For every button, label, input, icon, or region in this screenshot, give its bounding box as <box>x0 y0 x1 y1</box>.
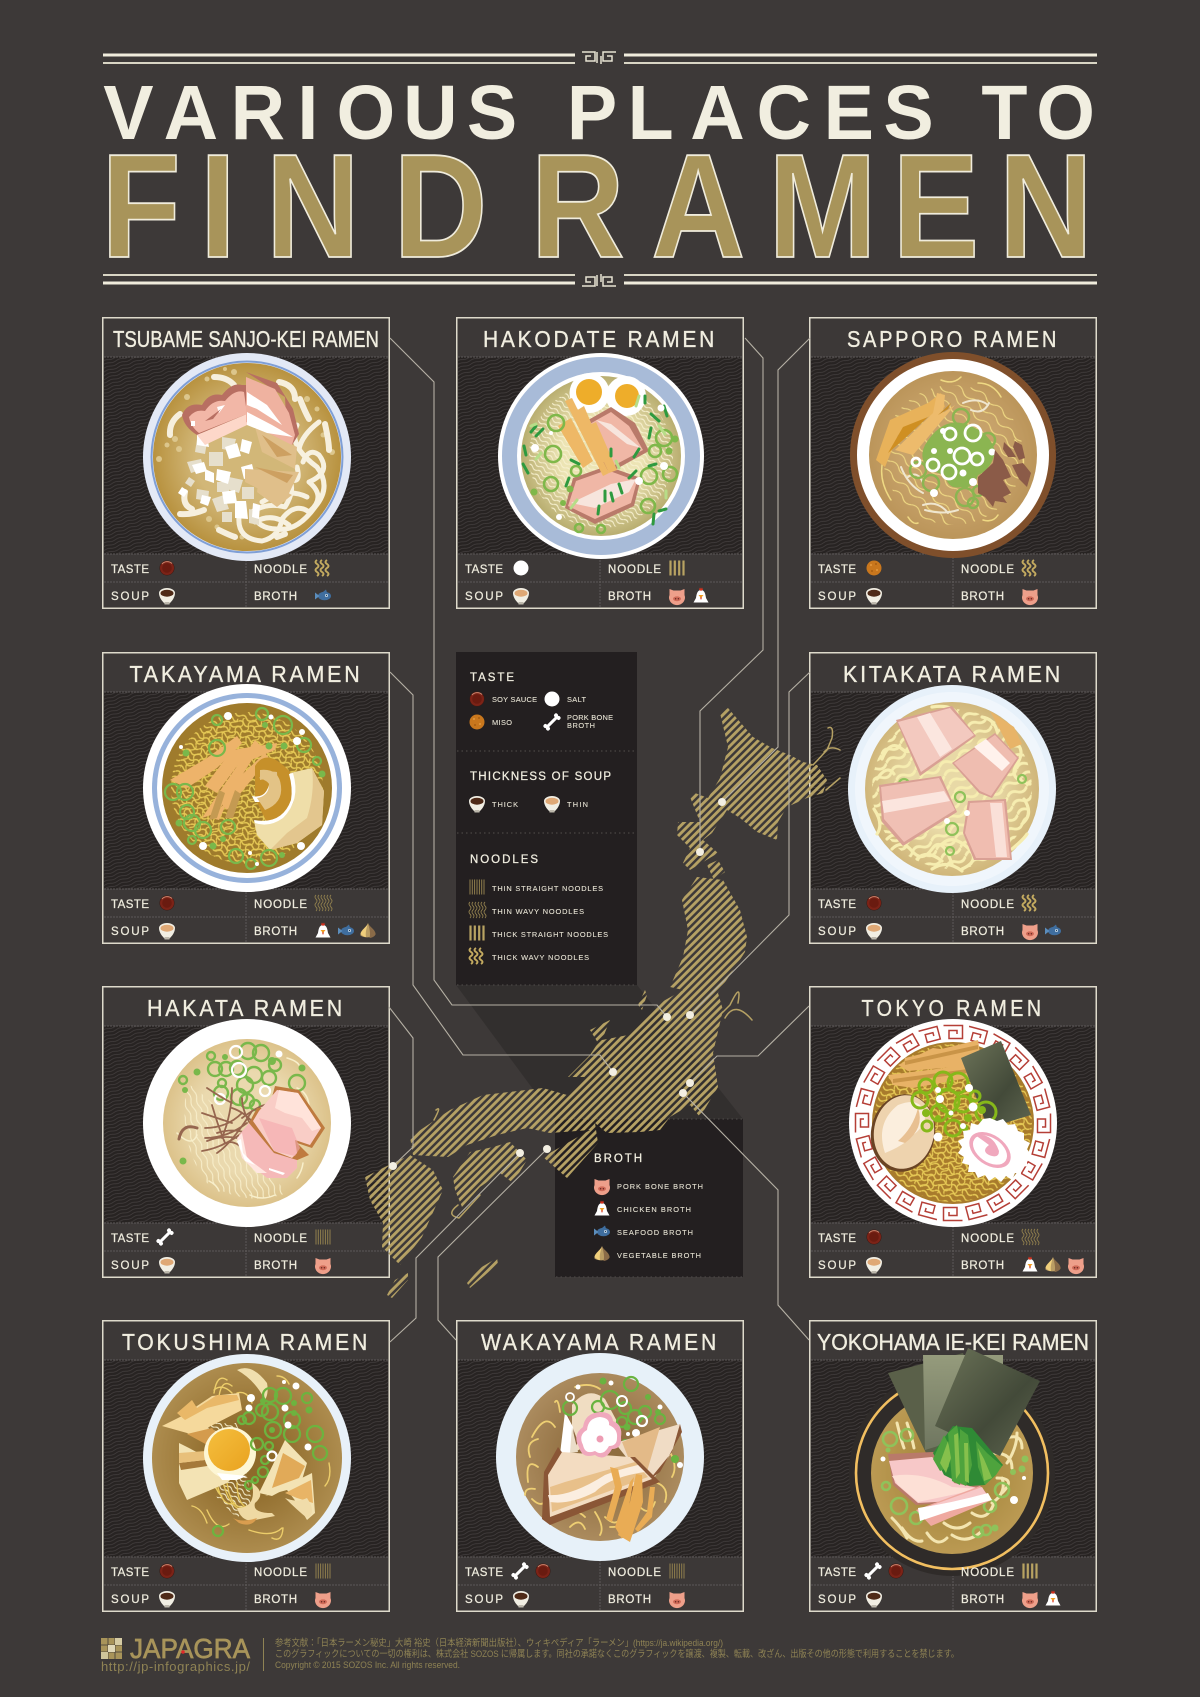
row icons <box>159 1564 331 1608</box>
row labels <box>465 1567 661 1606</box>
legend soup items <box>469 796 588 812</box>
legend taste items <box>470 692 613 731</box>
panel: legend taste, soup, noodles <box>456 652 637 985</box>
title: HAKATA RAMEN <box>147 995 345 1021</box>
row labels: TASTE <box>111 899 149 911</box>
legend noodle items <box>469 880 608 964</box>
footer notes: このグラフィックについての一切の権利は、株式会社 SOZOS に帰属します。同社の承諾なくこのグラフィックを譲渡、複製、転載、改ざん、出版その他の形態で利用することを禁じます。 <box>275 1648 959 1660</box>
title: SAPPORO RAMEN <box>847 326 1059 352</box>
row icons <box>866 560 1038 605</box>
footer notes: 参考文献：「日本ラーメン秘史」大崎 裕史（日本経済新聞出版社）、ウィキペディア「ラーメン」(https://ja.wikipedia.org/) <box>275 1637 723 1649</box>
row labels: NOODLE <box>254 1233 307 1245</box>
nori sheets <box>888 1348 1040 1456</box>
title: YOKOHAMA IE-KEI RAMEN <box>817 1329 1089 1355</box>
row labels: SOUP <box>465 1594 503 1606</box>
footer notes: Copyright © 2015 SOZOS Inc. All rights reserved. <box>275 1660 460 1671</box>
logo text: JAPAGRA <box>130 1633 250 1664</box>
panel: Tsubame Sanjo-kei Ramen <box>103 318 389 608</box>
legend noodle items: THIN STRAIGHT NOODLES <box>492 884 603 893</box>
row labels: SOUP <box>818 926 856 938</box>
legend taste items: PORK BONE <box>567 713 613 722</box>
row labels <box>111 899 307 938</box>
bowl <box>848 685 1056 893</box>
panel: Hakodate Ramen <box>457 318 743 608</box>
row icons <box>864 1562 1060 1608</box>
legend taste items: MISO <box>492 718 512 727</box>
title: KITAKATA RAMEN <box>843 661 1063 687</box>
row labels <box>818 1567 1014 1606</box>
bowl <box>143 353 351 561</box>
panel: Takayama Ramen <box>103 653 389 943</box>
row labels: TASTE <box>111 1233 149 1245</box>
row labels: BROTH <box>608 591 651 603</box>
row labels: NOODLE <box>961 564 1014 576</box>
legend heading soup: THICKNESS OF SOUP <box>470 771 611 783</box>
footer divider <box>262 1638 264 1671</box>
legend soup items: THIN <box>567 800 588 809</box>
panel: Yokohama Ie-kei Ramen <box>810 1321 1096 1611</box>
legend heading taste: TASTE <box>470 672 514 684</box>
row labels: TASTE <box>111 564 149 576</box>
row labels: NOODLE <box>961 1567 1014 1579</box>
title: TOKUSHIMA RAMEN <box>122 1329 370 1355</box>
row labels: NOODLE <box>608 564 661 576</box>
row labels: TASTE <box>465 1567 503 1579</box>
legend noodle items: THIN WAVY NOODLES <box>492 907 584 916</box>
row labels: NOODLE <box>961 1233 1014 1245</box>
logo dot <box>181 1650 185 1654</box>
row labels: BROTH <box>254 1594 297 1606</box>
title: TSUBAME SANJO-KEI RAMEN <box>113 326 379 352</box>
row labels: BROTH <box>961 926 1004 938</box>
row labels: NOODLE <box>254 564 307 576</box>
row labels <box>818 899 1014 938</box>
legend broth items <box>594 1179 703 1261</box>
row labels: TASTE <box>818 1567 856 1579</box>
connector lines <box>389 338 810 1342</box>
bowl <box>143 1354 351 1562</box>
legend soup items: THICK <box>492 800 518 809</box>
row labels: SOUP <box>465 591 503 603</box>
bowl <box>496 1353 704 1561</box>
row labels <box>111 1567 307 1606</box>
row labels: BROTH <box>254 591 297 603</box>
row labels: TASTE <box>465 564 503 576</box>
row icons <box>159 560 331 604</box>
row labels: TASTE <box>818 1233 856 1245</box>
legend broth items: CHICKEN BROTH <box>617 1205 691 1214</box>
bowl <box>498 353 704 559</box>
row labels: TASTE <box>111 1567 149 1579</box>
panel: Tokushima Ramen <box>103 1321 389 1611</box>
row labels: SOUP <box>818 1594 856 1606</box>
panel: legend broth <box>555 1119 743 1277</box>
logo mark <box>101 1638 122 1659</box>
row icons <box>866 895 1061 940</box>
row labels: BROTH <box>254 926 297 938</box>
legend noodle items: THICK WAVY NOODLES <box>492 953 589 962</box>
row labels: SOUP <box>818 591 856 603</box>
row labels <box>111 1233 307 1272</box>
legend heading broth: BROTH <box>594 1153 642 1165</box>
row labels: BROTH <box>961 1594 1004 1606</box>
row icons <box>866 1229 1084 1274</box>
legend broth items: SEAFOOD BROTH <box>617 1228 693 1237</box>
row labels: BROTH <box>961 591 1004 603</box>
city markers <box>389 798 726 1170</box>
row labels: NOODLE <box>961 899 1014 911</box>
bowl <box>143 684 351 892</box>
row labels: NOODLE <box>608 1567 661 1579</box>
panel: Tokyo Ramen <box>810 987 1096 1277</box>
row labels: SOUP <box>818 1260 856 1272</box>
shadow behind legends <box>456 985 743 1119</box>
row labels: BROTH <box>608 1594 651 1606</box>
row labels <box>818 1233 1014 1272</box>
title: HAKODATE RAMEN <box>483 326 717 352</box>
row labels: NOODLE <box>254 899 307 911</box>
legend taste items: SALT <box>567 695 586 704</box>
row labels: BROTH <box>254 1260 297 1272</box>
title: TAKAYAMA RAMEN <box>130 661 362 687</box>
row icons <box>513 560 708 605</box>
decorative noodles <box>434 727 840 1218</box>
row labels: NOODLE <box>254 1567 307 1579</box>
url: http://jp-infographics.jp/ <box>101 1659 250 1674</box>
row labels: BROTH <box>961 1260 1004 1272</box>
row icons <box>511 1562 685 1608</box>
title line 1: VARIOUSPLACESTO <box>103 70 1095 156</box>
legend noodle items: THICK STRAIGHT NOODLES <box>492 930 608 939</box>
row labels <box>465 564 661 603</box>
row labels <box>111 564 307 603</box>
logo JAPAGRA <box>101 1633 250 1674</box>
title: TOKYO RAMEN <box>862 995 1044 1021</box>
bowl <box>850 352 1056 558</box>
top ornamental rule <box>103 52 1097 64</box>
row labels: SOUP <box>111 926 149 938</box>
bowl <box>849 1019 1057 1227</box>
title line 2: FINDRAMEN <box>101 123 1093 289</box>
legend taste items: SOY SAUCE <box>492 695 537 704</box>
bowl <box>849 1348 1055 1576</box>
legend broth items: PORK BONE BROTH <box>617 1182 703 1191</box>
legend taste items: BROTH <box>567 721 595 730</box>
map of Japan <box>365 708 840 1298</box>
row icons <box>159 895 376 940</box>
row icons <box>156 1228 331 1274</box>
row labels: SOUP <box>111 591 149 603</box>
legend heading noodles: NOODLES <box>470 854 538 866</box>
legend broth items: VEGETABLE BROTH <box>617 1251 701 1260</box>
row labels: TASTE <box>818 564 856 576</box>
panel: Hakata Ramen <box>103 987 389 1277</box>
bowl <box>143 1019 351 1227</box>
row labels: SOUP <box>111 1594 149 1606</box>
title: WAKAYAMA RAMEN <box>481 1329 719 1355</box>
panel: Wakayama Ramen <box>457 1321 743 1611</box>
footer notes <box>275 1637 959 1671</box>
bottom ornamental rule <box>103 274 1097 286</box>
row labels: TASTE <box>818 899 856 911</box>
row labels <box>818 564 1014 603</box>
panel: Sapporo Ramen <box>810 318 1096 608</box>
panel: Kitakata Ramen <box>810 653 1096 943</box>
row labels: SOUP <box>111 1260 149 1272</box>
